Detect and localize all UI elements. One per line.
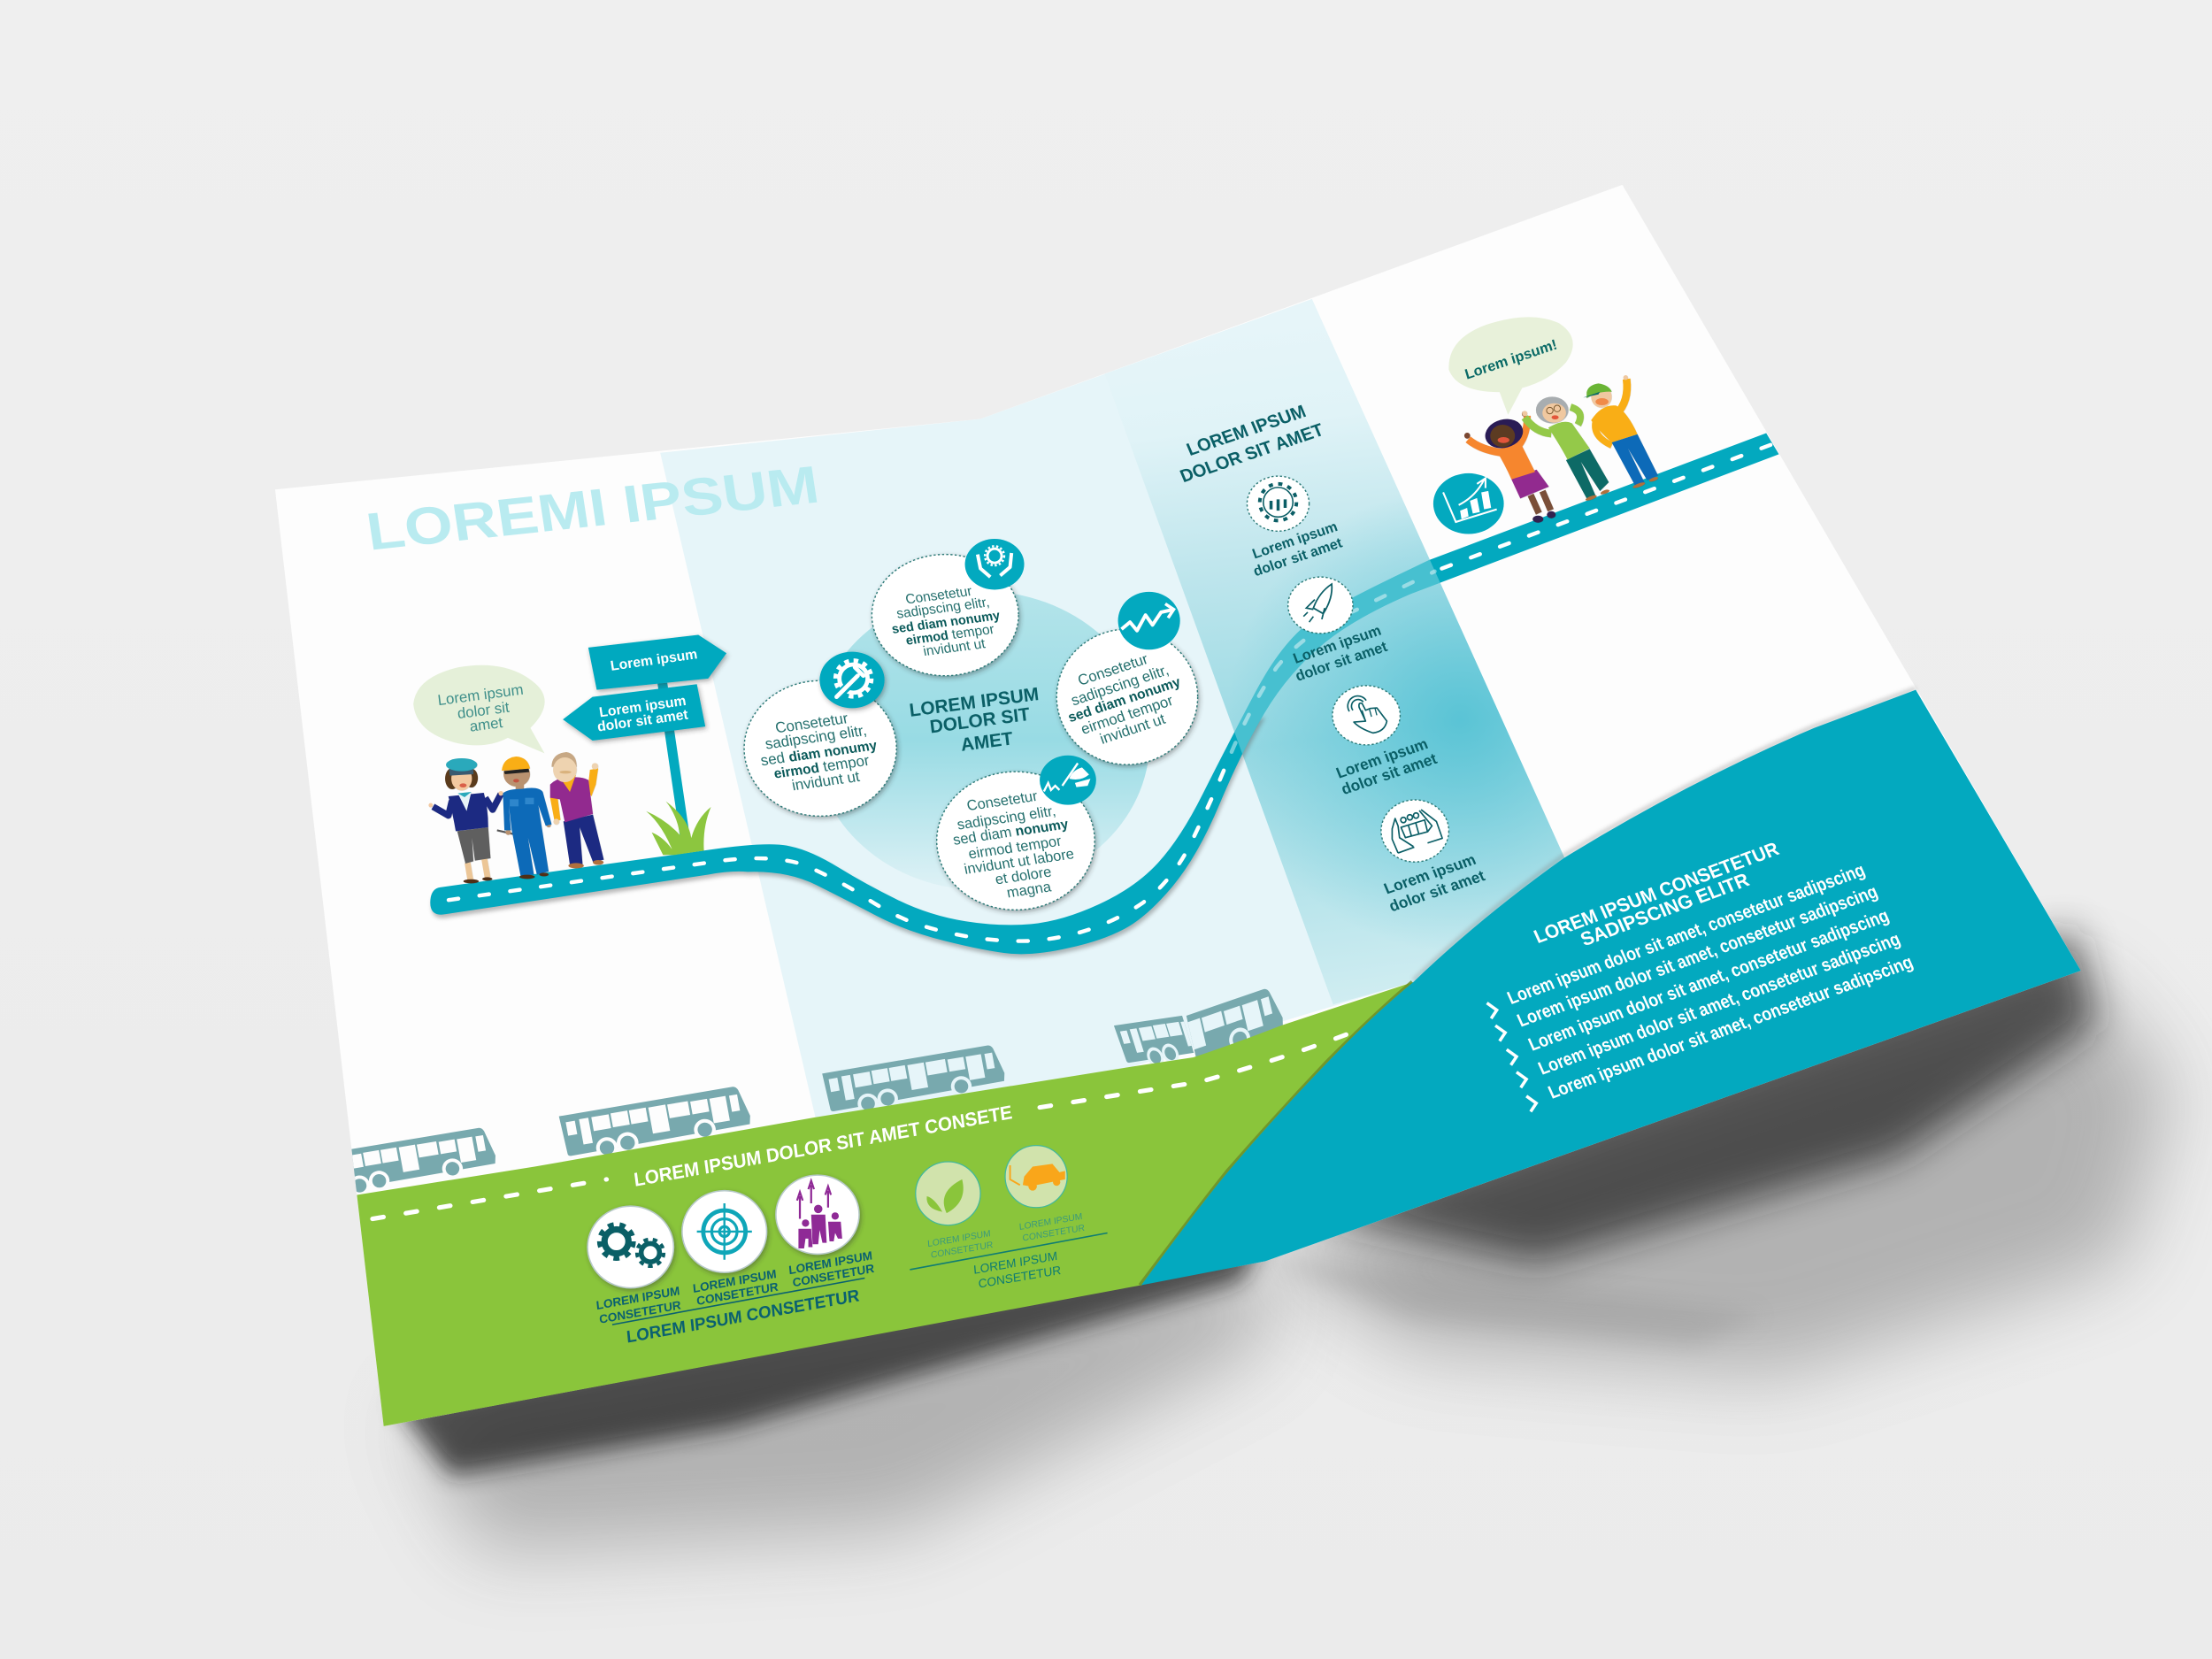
band item 4: hands and people: Lorem ipsum <box>1381 850 1479 897</box>
callout circle: zigzag: invidunt ut <box>1097 710 1168 748</box>
bus 4 folded <box>1114 989 1283 1064</box>
footer road dashes <box>373 1033 1351 1219</box>
bus 2 <box>559 1087 750 1156</box>
callout circle: zigzag: sadipscing elitr, <box>1069 661 1171 709</box>
footer labels right: LOREM IPSUM <box>1019 1212 1083 1233</box>
callout circle: signature: sadipscing elitr, <box>956 803 1057 833</box>
callout circle: gear wrench: sadipscing elitr, <box>764 722 868 753</box>
panel: teal wave <box>1140 688 2081 1285</box>
callout circle: gear wrench: eirmod tempor <box>772 752 871 782</box>
panel: green footer <box>357 982 1414 1426</box>
icon: gears <box>588 1206 673 1288</box>
callout circle: signature: sed diam nonumy <box>951 816 1070 849</box>
band item 3: touch: dolor sit amet <box>1339 749 1440 798</box>
person: yellow hoodie <box>1583 375 1659 489</box>
speech bubble left <box>413 665 545 753</box>
person: woman <box>1464 411 1555 523</box>
band item 1: gear people <box>1247 476 1345 580</box>
signpost: Lorem ipsum <box>598 694 687 720</box>
footer caption right: LOREM IPSUM <box>973 1249 1058 1277</box>
bullet list: Lorem ipsum dolor sit amet, consetetur sadipscing <box>1545 952 1916 1103</box>
bullet list: Lorem ipsum dolor sit amet, consetetur sadipscing <box>1525 905 1893 1055</box>
footer caption right: CONSETETUR <box>978 1263 1062 1291</box>
icon: growth chart <box>1433 473 1504 534</box>
icon: people arrows <box>776 1175 859 1254</box>
person: waving man <box>550 752 603 868</box>
icon: zigzag arrow <box>1118 592 1180 649</box>
title: LOREMI IPSUM <box>363 455 823 562</box>
callout circle: quality hands: Consetetur <box>904 584 973 607</box>
footer labels left: LOREM IPSUM <box>692 1267 777 1295</box>
signpost: Lorem ipsum <box>610 647 698 674</box>
speech bubble right: Lorem ipsum! <box>1463 336 1559 383</box>
speech bubble left: dolor sit <box>457 699 511 722</box>
band item 1: gear people: Lorem ipsum <box>1250 518 1340 562</box>
footer labels right: LOREM IPSUM <box>927 1229 991 1249</box>
icon: leaves <box>916 1162 980 1225</box>
signpost <box>563 634 726 847</box>
icon: target <box>682 1191 767 1272</box>
person: mechanic <box>497 757 551 879</box>
callout circle: signature: invidunt ut labore <box>963 846 1075 878</box>
central heading: DOLOR SIT <box>929 704 1031 737</box>
people group right <box>1464 375 1659 523</box>
band item 4: hands and people: dolor sit amet <box>1386 866 1487 915</box>
footer labels left: CONSETETUR <box>696 1280 779 1308</box>
band heading: LOREM IPSUM <box>1184 402 1309 460</box>
speech bubble right <box>1448 317 1573 415</box>
bus 1 <box>351 1127 495 1193</box>
callout circle: gear wrench: Consetetur <box>774 710 849 736</box>
band item 2: rocket <box>1288 577 1390 685</box>
footer labels left: CONSETETUR <box>599 1298 681 1326</box>
cast shadow under brochure <box>395 931 2172 1552</box>
panel: light blue inner column <box>660 299 1564 1118</box>
buses <box>314 985 1287 1202</box>
band item 2: rocket: dolor sit amet <box>1293 638 1390 685</box>
bullet list: Lorem ipsum dolor sit amet, consetetur sadipscing <box>1504 860 1868 1009</box>
callout circle: signature: et dolore <box>994 864 1053 887</box>
central heading: AMET <box>960 728 1014 756</box>
footer labels right: CONSETETUR <box>931 1240 994 1261</box>
band item 3: touch: Lorem ipsum <box>1333 734 1431 782</box>
bullet list <box>1486 860 1916 1111</box>
callout circle: gear wrench <box>744 680 896 816</box>
callout circle: signature: eirmod tempor <box>967 833 1064 863</box>
footer labels right: CONSETETUR <box>1022 1224 1085 1244</box>
footer caption left: LOREM IPSUM CONSETETUR <box>626 1286 860 1348</box>
central heading: LOREM IPSUM <box>908 684 1040 721</box>
callout circle: quality hands: invidunt ut <box>922 636 987 659</box>
callout circle: quality hands: eirmod tempor <box>904 622 995 649</box>
person: green top <box>1522 396 1610 502</box>
icon: hands with gear <box>965 539 1025 589</box>
callout circle: quality hands <box>872 555 1018 676</box>
bullet list: Lorem ipsum dolor sit amet, consetetur sadipscing <box>1514 881 1881 1031</box>
icon: gear wrench <box>819 652 885 708</box>
callout circle: gear wrench: sed diam nonumy <box>759 736 879 769</box>
brochure page <box>275 185 2081 1426</box>
central disc <box>814 591 1149 890</box>
band item 2: rocket: Lorem ipsum <box>1291 622 1384 667</box>
footer labels left: LOREM IPSUM <box>595 1284 680 1312</box>
speech bubble left: Lorem ipsum <box>437 681 525 709</box>
people group left <box>428 752 603 883</box>
icon: electric car <box>1005 1146 1067 1208</box>
band item 1: gear people: dolor sit amet <box>1251 534 1345 580</box>
callout circle: zigzag: sed diam nonumy <box>1066 674 1183 726</box>
panel: gradient band <box>1104 299 1564 1004</box>
callout circle: zigzag <box>1056 629 1198 764</box>
callout circle: zigzag: Consetetur <box>1075 650 1150 689</box>
bus 3 <box>822 1046 1005 1111</box>
bullet list: Lorem ipsum dolor sit amet, consetetur sadipscing <box>1535 929 1903 1079</box>
person: conductor <box>428 758 503 883</box>
road <box>430 434 1778 960</box>
band item 4: hands and people <box>1381 800 1487 915</box>
footer heading: LOREM IPSUM DOLOR SIT AMET CONSETE <box>633 1101 1013 1191</box>
callout circle: signature: magna <box>1005 879 1053 901</box>
band heading: DOLOR SIT AMET <box>1178 420 1327 487</box>
signpost: dolor sit amet <box>596 707 690 735</box>
footer labels left: CONSETETUR <box>792 1262 875 1289</box>
callout circle: signature <box>937 772 1094 910</box>
footer labels left <box>595 1248 875 1326</box>
footer caption right <box>910 1233 1108 1291</box>
footer labels left: LOREM IPSUM <box>788 1248 873 1277</box>
central heading <box>908 684 1040 756</box>
band item 3: touch <box>1333 686 1440 798</box>
icon: signature hand <box>1040 756 1096 805</box>
callout circle: quality hands: sed diam nonumy <box>890 609 1002 637</box>
teal heading: LOREM IPSUM CONSETETUR <box>1531 837 1783 948</box>
callout circle: gear wrench: invidunt ut <box>790 768 861 794</box>
callout circle: zigzag: eirmod tempor <box>1079 692 1176 738</box>
callout circle: quality hands: sadipscing elitr, <box>895 595 991 622</box>
grass <box>646 802 711 855</box>
footer labels right <box>927 1212 1085 1261</box>
callout circle: signature: Consetetur <box>965 788 1040 814</box>
speech bubble left: amet <box>469 714 503 735</box>
teal heading: SADIPSCING ELITR <box>1577 868 1753 950</box>
